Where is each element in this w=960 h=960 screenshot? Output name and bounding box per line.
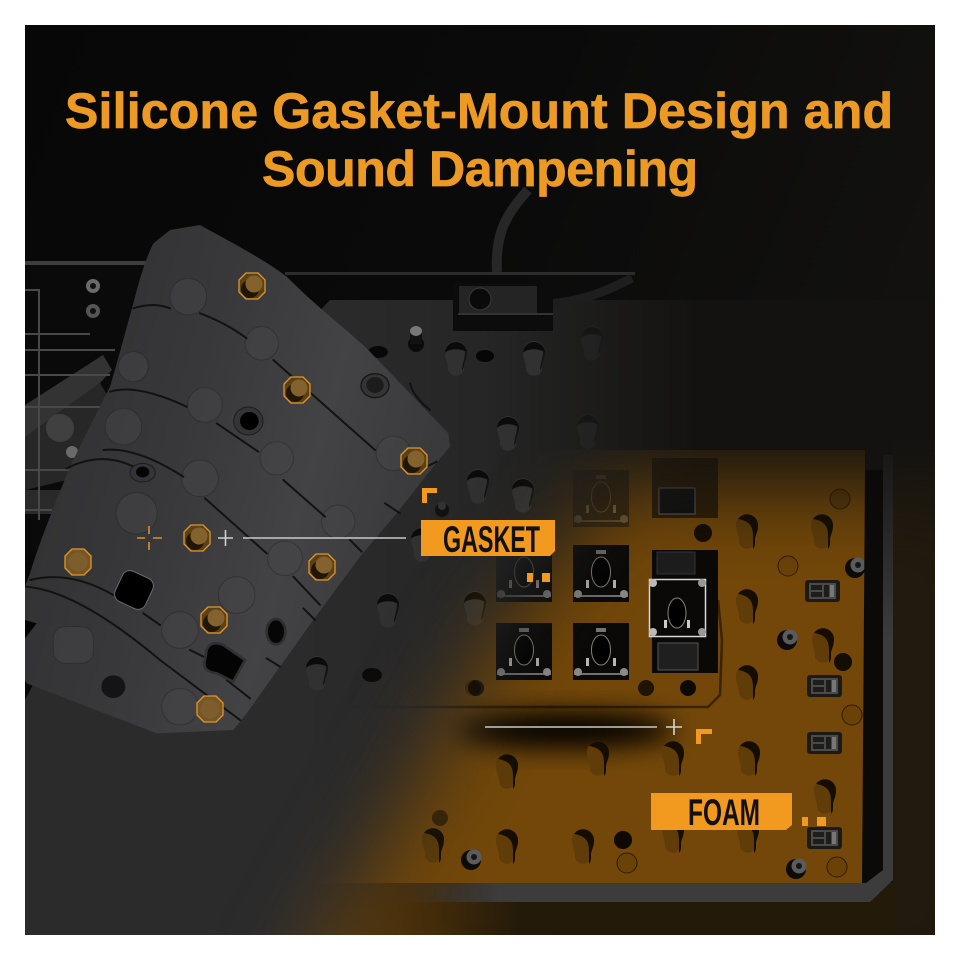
- silicone gasket sheet: [25, 225, 450, 733]
- gasket pointer line: [137, 526, 406, 550]
- orange foam layer: [309, 450, 865, 883]
- keyboard chassis frame, top left: [25, 261, 635, 520]
- gasket label: [421, 520, 555, 556]
- screw posts: [461, 558, 866, 879]
- port connectors: [805, 580, 842, 849]
- gasket openings: [25, 374, 389, 698]
- gasket body: [25, 225, 450, 733]
- foam label: FOAM: [688, 792, 760, 833]
- title: Sound Dampening: [262, 141, 698, 197]
- keyhole cutouts: [422, 514, 836, 864]
- highlighted gasket bumps: [65, 273, 427, 722]
- round holes: [432, 489, 862, 877]
- gasket grooves: [25, 305, 437, 720]
- foam plate surface: [309, 450, 865, 883]
- title: [65, 83, 893, 197]
- switch cutouts: [496, 458, 718, 680]
- gray plate holes: [306, 326, 545, 696]
- outer keyboard frame: [400, 455, 893, 902]
- gasket raised pads: [53, 278, 411, 725]
- cable and power connector: [453, 190, 632, 331]
- foam shadow under panel: [455, 712, 675, 748]
- gasket corner mark: [422, 488, 437, 503]
- orange accent squares near foam label: [802, 817, 826, 826]
- foam corner mark: [696, 729, 712, 744]
- gasket label: GASKET: [443, 519, 540, 560]
- title: Silicone Gasket-Mount Design and: [65, 83, 893, 139]
- lower dark strip: [282, 883, 893, 935]
- orange accent squares near gasket label: [527, 573, 550, 582]
- foam pointer line: [485, 719, 682, 735]
- raised panel edge: [410, 600, 724, 708]
- gray mounting plate: [25, 300, 666, 935]
- right side dark strip: [893, 493, 935, 935]
